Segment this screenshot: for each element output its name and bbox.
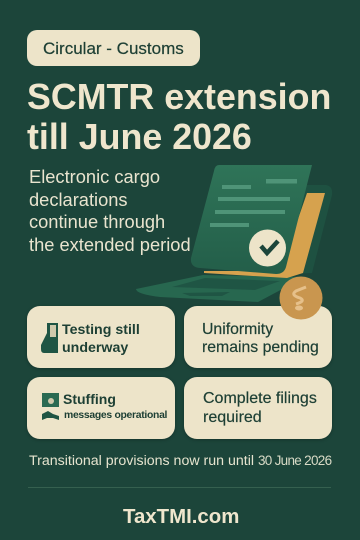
title: SCMTR extension — [27, 77, 331, 117]
card: uniformity — [184, 306, 332, 368]
card: testing — [27, 306, 175, 368]
intro text: declarations — [29, 188, 128, 210]
card: stuffing: Stuffing — [63, 391, 116, 407]
card: complete filings: required — [203, 409, 262, 426]
laptop base — [136, 275, 305, 302]
card: stuffing: messages operational — [64, 410, 167, 421]
icon: check circle — [249, 230, 286, 266]
intro text: Electronic cargo — [29, 166, 160, 187]
footer brand: TaxTMI.com — [123, 506, 239, 528]
card: complete filings — [184, 377, 332, 439]
badge: Circular - Customs — [27, 30, 200, 66]
note: transitional provisions: Transitional provisions now run until 30 June 2026 — [29, 453, 331, 469]
icon: stuffing message — [42, 393, 59, 420]
card: uniformity: Uniformity — [202, 321, 273, 338]
card: uniformity: remains pending — [202, 339, 319, 356]
intro text — [29, 166, 191, 255]
laptop screen back — [240, 185, 332, 275]
title: till June 2026 — [27, 116, 252, 156]
document — [191, 165, 312, 274]
card: complete filings: Complete filings — [203, 390, 317, 407]
card: stuffing — [27, 377, 175, 439]
title — [27, 77, 331, 156]
icon: gold coin — [280, 276, 322, 320]
intro text: continue through — [29, 211, 165, 232]
intro text: the extended period — [29, 234, 191, 254]
card: testing: underway — [62, 340, 128, 356]
icon: test flask — [41, 323, 58, 353]
badge: Circular - Customs: Circular - Customs — [43, 39, 184, 58]
gold folder page — [204, 193, 325, 278]
illustration: laptop with document — [136, 165, 332, 320]
card: testing: Testing still — [62, 322, 140, 338]
